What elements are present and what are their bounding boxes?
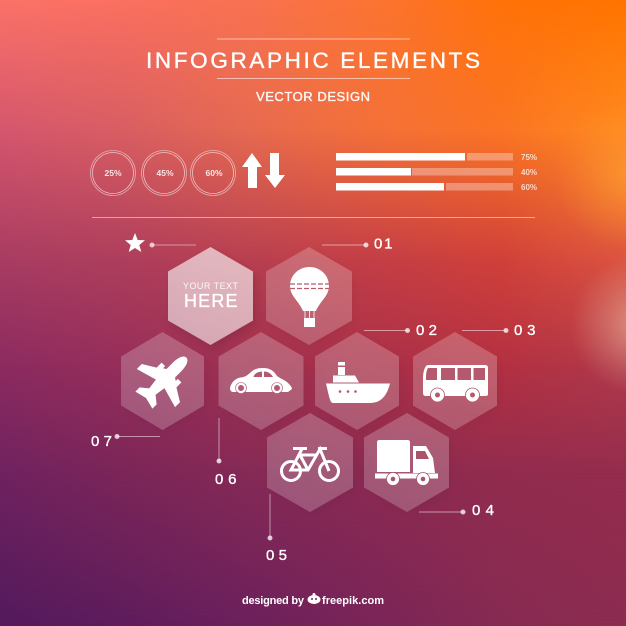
hexagon: ship: [315, 332, 399, 430]
bar 75%: [336, 153, 537, 162]
bar 75%: 75%: [521, 153, 537, 162]
footer credit: designed by: [242, 595, 305, 607]
hexagon: truck: [364, 413, 449, 512]
callout 05: 05: [266, 547, 287, 564]
callout 06: 06: [215, 471, 236, 488]
icon: hot air balloon: [290, 267, 329, 327]
callout 03: [462, 322, 536, 339]
hexagon: your text here: YOUR TEXT: [183, 281, 238, 291]
callout 01: 01: [374, 236, 392, 252]
bar 40%: 40%: [521, 168, 537, 177]
hexagon: hot air balloon: [266, 247, 352, 345]
gauge 25%: [90, 150, 136, 196]
icon: airplane: [125, 339, 205, 419]
footer credit: [242, 593, 384, 607]
callout: star leader: [150, 242, 196, 248]
subtitle: VECTOR DESIGN: [256, 89, 370, 104]
hexagon: bus: [413, 332, 497, 430]
callout 04: [419, 502, 494, 519]
callout 02: [364, 322, 437, 339]
icon: ship: [326, 362, 390, 403]
circular percentage gauges: [90, 150, 236, 196]
callout 01: [322, 236, 392, 252]
hexagon: bicycle: [267, 413, 353, 512]
footer credit: freepik.com: [322, 595, 384, 607]
icon: car: [230, 368, 292, 394]
callout 07: [91, 433, 160, 450]
hexagon: airplane: [121, 332, 205, 430]
gauge 25%: 25%: [104, 168, 122, 178]
progress bars: [336, 153, 537, 192]
bar 40%: [336, 168, 537, 177]
hexagon: car: [218, 332, 304, 430]
title: INFOGRAPHIC ELEMENTS: [146, 48, 480, 73]
icon: bus: [423, 365, 488, 402]
callout 06: [215, 418, 236, 488]
icon: truck: [375, 440, 438, 486]
gauge 45%: 45%: [156, 168, 174, 178]
icon: up and down arrows: [242, 153, 285, 188]
bar 60%: [336, 183, 537, 192]
callout 03: 03: [514, 322, 536, 339]
gauge 45%: [142, 150, 186, 196]
callout 02: 02: [416, 322, 437, 339]
icon: star: [125, 233, 145, 252]
callout 04: 04: [472, 502, 494, 519]
callout 05: [266, 494, 287, 564]
icon: freepik mascot: [308, 593, 320, 604]
bar 60%: 60%: [521, 183, 537, 192]
icon: bicycle: [282, 448, 338, 480]
callout 07: 07: [91, 433, 112, 450]
hexagon: your text here: [168, 247, 253, 345]
hexagon: your text here: HERE: [184, 291, 238, 311]
gauge 60%: [190, 150, 236, 196]
gauge 60%: 60%: [205, 168, 223, 178]
